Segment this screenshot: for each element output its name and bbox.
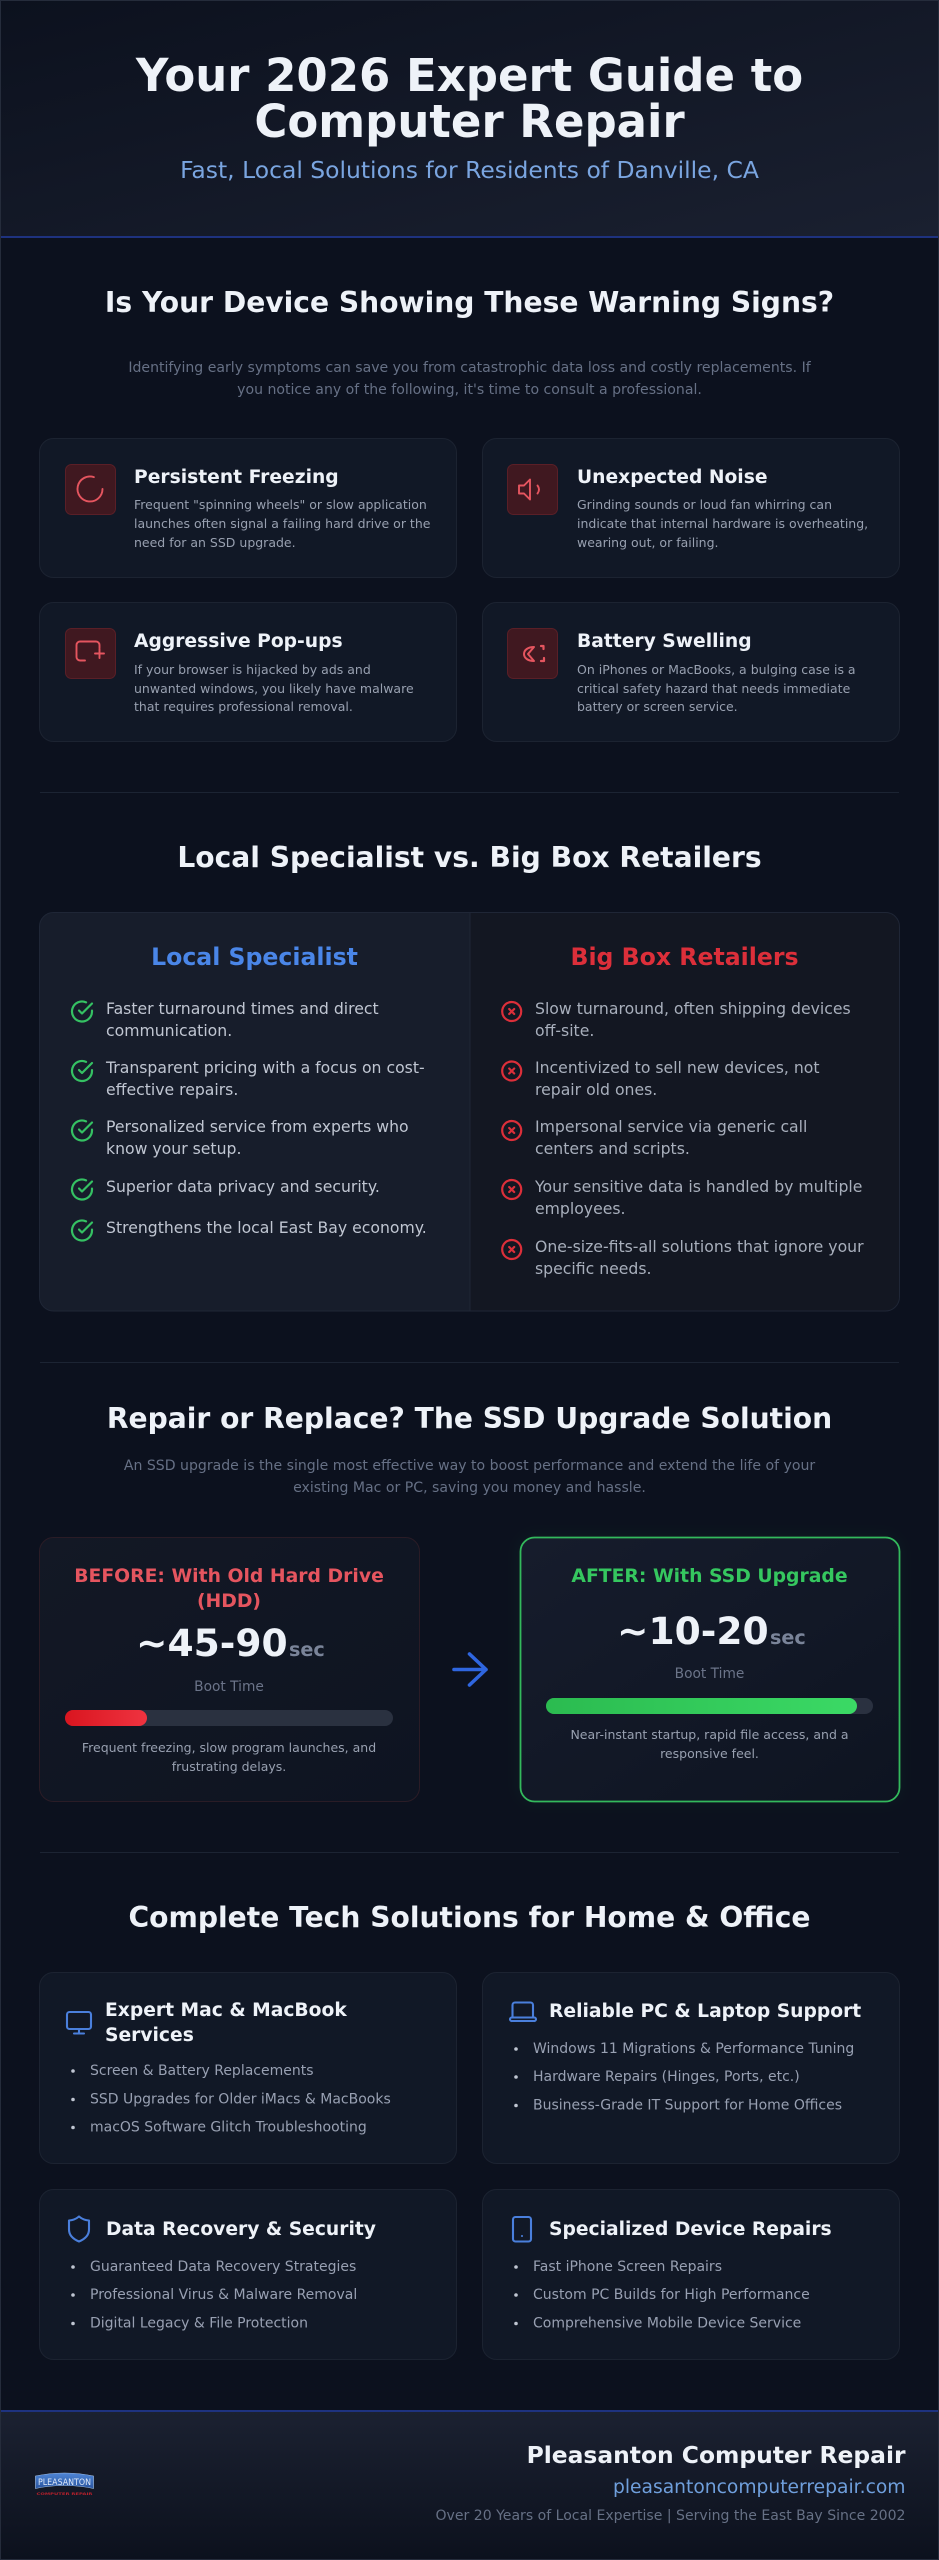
- description: On iPhones or MacBooks, a bulging case is a: [577, 662, 856, 677]
- column heading: Big Box Retailers: [570, 943, 799, 971]
- heading: [74, 1566, 384, 1612]
- footer: [0, 2410, 939, 2560]
- description: If your browser is hijacked by ads and: [134, 662, 371, 677]
- card: data recovery and security: [40, 2190, 456, 2360]
- bullet list: [71, 2063, 391, 2136]
- logo: [36, 2473, 94, 2496]
- bullet list: SSD Upgrades for Older iMacs & MacBooks: [90, 2092, 391, 2108]
- title: Your 2026 Expert Guide to: [135, 49, 803, 102]
- heading: BEFORE: With Old Hard Drive: [74, 1566, 384, 1587]
- item 4: Superior data privacy and security.: [106, 1177, 380, 1196]
- item 3: know your setup.: [106, 1139, 241, 1158]
- subtitle: Fast, Local Solutions for Residents of Danville, CA: [180, 156, 759, 184]
- heading: Persistent Freezing: [134, 467, 339, 488]
- section: SSD upgrade: [40, 1402, 901, 1803]
- icon: laptop: [510, 2002, 536, 2021]
- boot time value: sec: [770, 1626, 806, 1649]
- panel: big box retailers: [470, 912, 900, 1311]
- description: responsive feel.: [660, 1746, 759, 1761]
- company details: Pleasanton Computer Repair: [527, 2441, 906, 2469]
- description: wearing out, or failing.: [577, 535, 719, 550]
- heading: [105, 2000, 347, 2046]
- title: Computer Repair: [254, 95, 685, 148]
- intro text: warning signs: [128, 360, 812, 398]
- heading: (HDD): [197, 1591, 261, 1612]
- icon: pop-up window: [66, 628, 116, 678]
- description: [577, 497, 868, 550]
- bullet list: Digital Legacy & File Protection: [90, 2316, 308, 2332]
- bullet list: Business-Grade IT Support for Home Offices: [533, 2098, 842, 2114]
- heading: Data Recovery & Security: [106, 2219, 376, 2240]
- logo: PLEASANTON: [38, 2478, 91, 2488]
- section: tech solutions: [40, 1901, 900, 2360]
- item 2: [72, 1058, 425, 1099]
- item 1: [72, 999, 379, 1040]
- heading: tech solutions: Complete Tech Solutions for Home & Office: [128, 1901, 810, 1934]
- description: Grinding sounds or loud fan whirring can: [577, 497, 832, 512]
- progress bar: [546, 1698, 873, 1714]
- label: Boot Time: [194, 1679, 264, 1695]
- description: critical safety hazard that needs immediate: [577, 681, 851, 696]
- description: Frequent "spinning wheels" or slow application: [134, 497, 427, 512]
- item 5: [502, 1237, 864, 1278]
- arrow: [454, 1654, 486, 1685]
- section: warning signs: [40, 286, 900, 742]
- item 1: off-site.: [535, 1021, 594, 1040]
- intro text: warning signs: you notice any of the following, it's time to consult a professional.: [237, 382, 702, 398]
- bullet list: macOS Software Glitch Troubleshooting: [90, 2120, 367, 2136]
- item 3: [72, 1117, 409, 1158]
- description: Near-instant startup, rapid file access, and a: [570, 1727, 849, 1742]
- item 4: [502, 1177, 862, 1218]
- heading: comparison: Local Specialist vs. Big Box Retailers: [177, 841, 762, 874]
- bullet list: Custom PC Builds for High Performance: [533, 2287, 810, 2303]
- heading: Aggressive Pop-ups: [134, 631, 343, 652]
- panel: after SSD: [518, 1535, 901, 1803]
- card: PC and laptop support: [482, 1972, 900, 2164]
- item 3: centers and scripts.: [535, 1139, 690, 1158]
- heading: Unexpected Noise: [577, 467, 768, 488]
- item 1: Faster turnaround times and direct: [106, 999, 379, 1018]
- heading: warning signs: Is Your Device Showing These Warning Signs?: [105, 286, 834, 319]
- item 3: [502, 1117, 807, 1158]
- intro text: SSD upgrade: An SSD upgrade is the single most effective way to boost performance and extend the life of your: [124, 1458, 815, 1474]
- label: Boot Time: [675, 1666, 744, 1682]
- description: [577, 662, 856, 714]
- item 4: employees.: [535, 1199, 626, 1218]
- description: need for an SSD upgrade.: [134, 535, 296, 550]
- title: [135, 49, 803, 148]
- header band: [0, 0, 939, 238]
- description: [570, 1727, 849, 1761]
- item 4: Your sensitive data is handled by multiple: [534, 1177, 862, 1196]
- heading: AFTER: With SSD Upgrade: [571, 1566, 848, 1587]
- boot time value: ~45-90: [136, 1621, 288, 1665]
- bullet list: Screen & Battery Replacements: [90, 2063, 314, 2079]
- item 2: [502, 1058, 820, 1099]
- icon: shield: [69, 2216, 89, 2242]
- item 2: effective repairs.: [106, 1080, 238, 1099]
- icon: speaker: [508, 464, 558, 514]
- heading: Reliable PC & Laptop Support: [549, 2001, 861, 2022]
- card: aggressive pop-ups: [40, 602, 456, 742]
- description: [134, 497, 431, 550]
- description: frustrating delays.: [172, 1759, 286, 1774]
- icon: swollen battery: [508, 628, 558, 678]
- boot time value: ~10-20: [617, 1609, 769, 1653]
- icon: monitor: [67, 2012, 91, 2034]
- description: [82, 1740, 376, 1774]
- bullet list: Guaranteed Data Recovery Strategies: [90, 2259, 356, 2275]
- description: indicate that internal hardware is overheating,: [577, 516, 868, 531]
- panel: before HDD: [40, 1538, 420, 1802]
- item 2: Incentivized to sell new devices, not: [535, 1058, 820, 1077]
- heading: Services: [105, 2025, 194, 2046]
- heading: SSD upgrade: Repair or Replace? The SSD Upgrade Solution: [107, 1402, 832, 1435]
- column heading: Local Specialist: [151, 943, 358, 971]
- card: persistent freezing: [40, 438, 456, 578]
- icon: phone: [513, 2217, 531, 2242]
- company details: pleasantoncomputerrepair.com: [613, 2477, 906, 2498]
- bullet list: [514, 2259, 810, 2332]
- bullet list: Fast iPhone Screen Repairs: [533, 2259, 722, 2275]
- bullet list: [514, 2041, 854, 2114]
- description: Frequent freezing, slow program launches, and: [82, 1740, 376, 1755]
- card: specialized device repairs: [482, 2190, 900, 2360]
- boot time value: sec: [289, 1638, 325, 1661]
- intro text: warning signs: Identifying early symptoms can save you from catastrophic data loss and costly replacements. If: [128, 360, 812, 376]
- item 2: Transparent pricing with a focus on cost-: [105, 1058, 425, 1077]
- company details: [436, 2441, 906, 2524]
- card: Mac services: [40, 1972, 456, 2164]
- item 5: Strengthens the local East Bay economy.: [106, 1218, 427, 1237]
- section: comparison: [40, 841, 900, 1311]
- description: battery or screen service.: [577, 699, 738, 714]
- card: unexpected noise: [482, 438, 900, 578]
- description: launches often signal a failing hard drive or the: [134, 516, 431, 531]
- card: battery swelling: [482, 602, 900, 742]
- item 3: Personalized service from experts who: [106, 1117, 409, 1136]
- heading: Specialized Device Repairs: [549, 2219, 832, 2240]
- progress bar: [65, 1710, 393, 1726]
- logo: COMPUTER REPAIR: [36, 2491, 93, 2496]
- intro text: SSD upgrade: existing Mac or PC, saving you money and hassle.: [293, 1480, 646, 1496]
- item 5: One-size-fits-all solutions that ignore your: [535, 1237, 864, 1256]
- item 5: specific needs.: [535, 1259, 652, 1278]
- item 1: Slow turnaround, often shipping devices: [535, 999, 851, 1018]
- description: that requires professional removal.: [134, 699, 353, 714]
- description: [134, 662, 414, 714]
- company details: Over 20 Years of Local Expertise | Serving the East Bay Since 2002: [436, 2508, 906, 2524]
- item 1: [502, 999, 851, 1040]
- panel: local specialist: [40, 912, 470, 1311]
- bullet list: Comprehensive Mobile Device Service: [533, 2316, 801, 2332]
- item 1: communication.: [106, 1021, 232, 1040]
- icon: spinner: [66, 464, 116, 514]
- bullet list: Professional Virus & Malware Removal: [90, 2287, 357, 2303]
- heading: Battery Swelling: [577, 631, 752, 652]
- heading: Expert Mac & MacBook: [105, 2000, 347, 2021]
- intro text: SSD upgrade: [124, 1458, 815, 1496]
- description: unwanted windows, you likely have malware: [134, 681, 414, 696]
- bullet list: [71, 2259, 357, 2332]
- bullet list: Windows 11 Migrations & Performance Tuning: [533, 2041, 854, 2057]
- item 2: repair old ones.: [535, 1080, 657, 1099]
- item 3: Impersonal service via generic call: [535, 1117, 807, 1136]
- bullet list: Hardware Repairs (Hinges, Ports, etc.): [533, 2069, 800, 2085]
